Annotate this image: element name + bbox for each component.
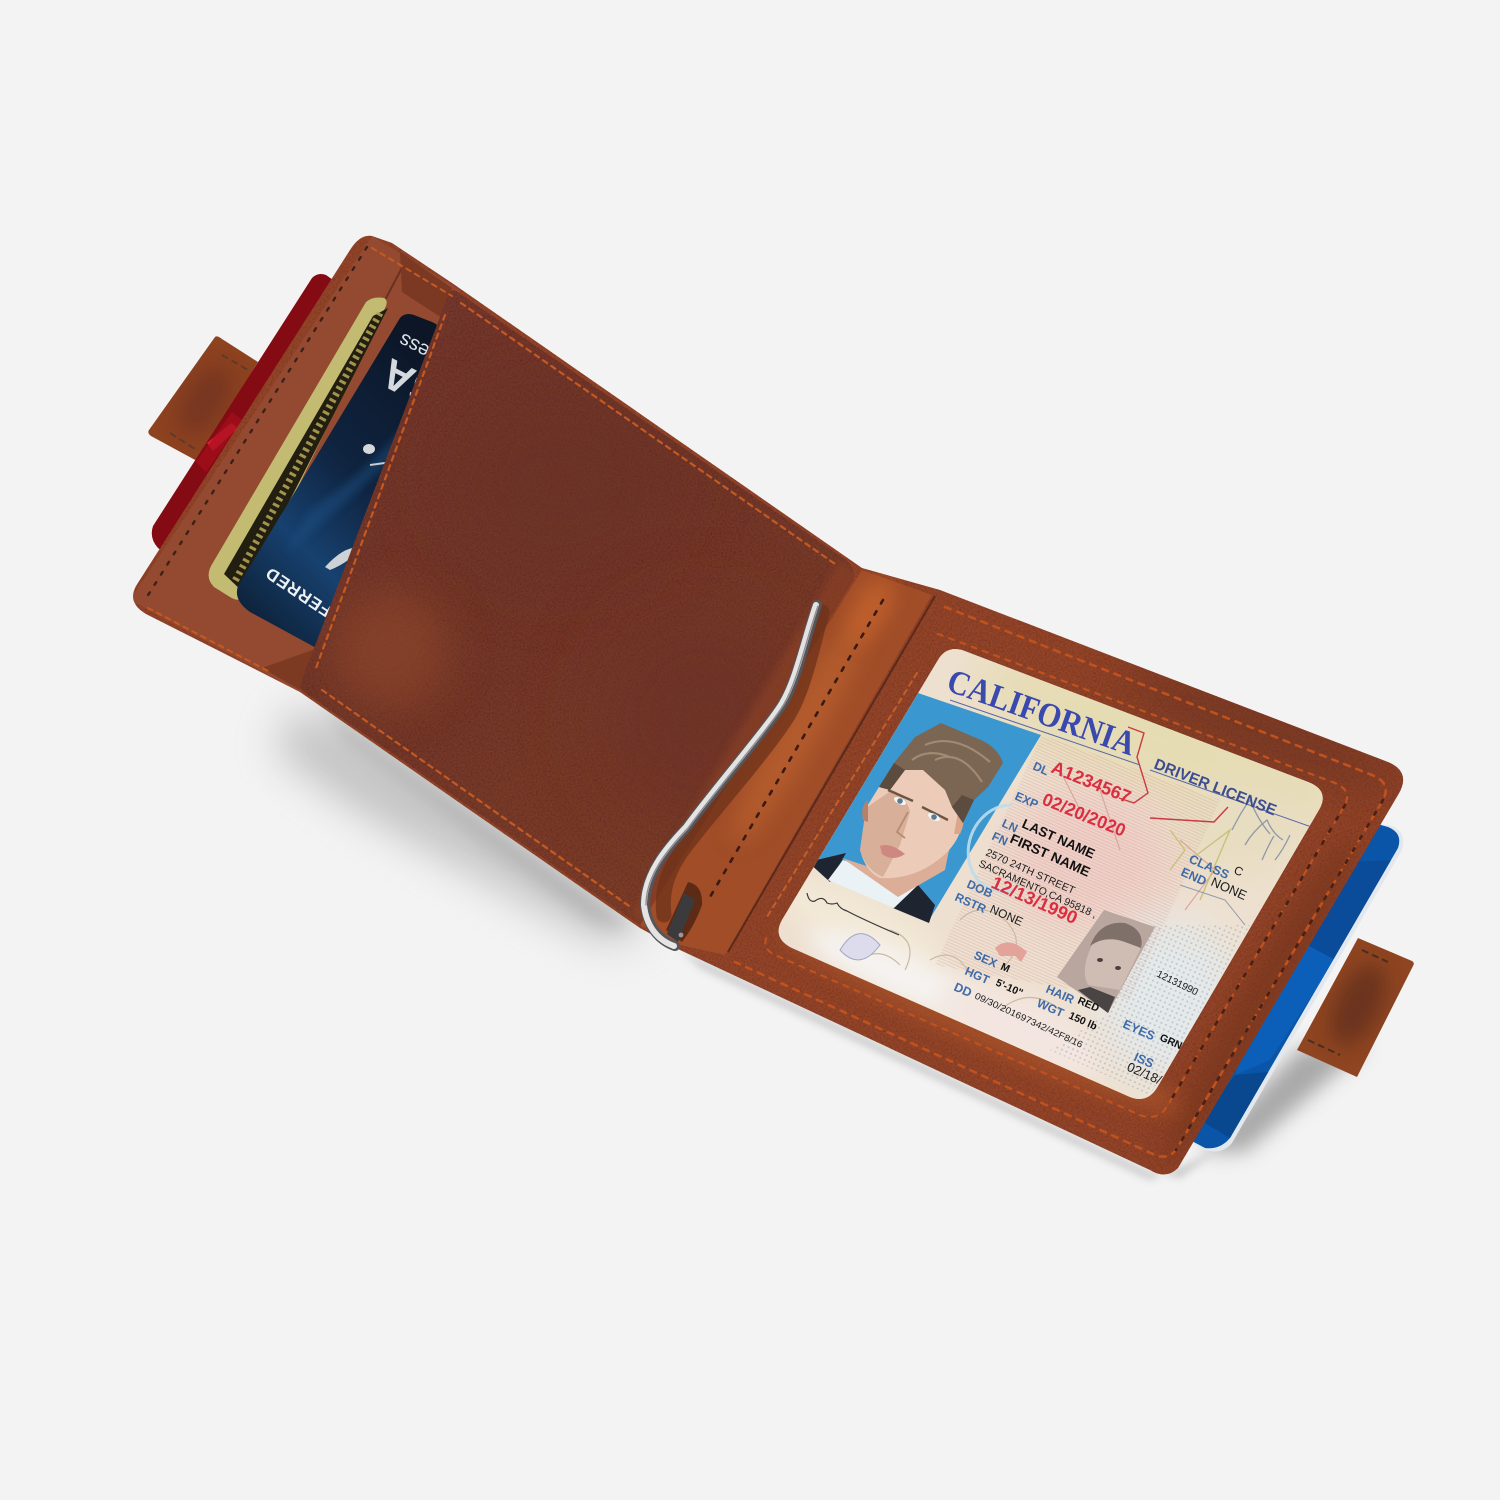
card silver details	[325, 444, 392, 570]
license text: M	[999, 961, 1012, 975]
ID window: California driver license	[778, 649, 1323, 1099]
license text: 5'-10"	[994, 977, 1025, 999]
leather seam lines	[262, 252, 935, 952]
hair	[879, 723, 1003, 823]
license background artwork	[778, 649, 1323, 1099]
cast shadows	[275, 700, 1368, 1180]
center spine highlight	[640, 570, 932, 955]
license text: EYES	[1121, 1017, 1157, 1043]
portrait photo	[808, 693, 1041, 923]
license text: DD	[952, 980, 974, 1000]
license text: CALIFORNIA	[942, 663, 1141, 763]
license text: SEX	[972, 948, 999, 971]
license text: 150 lb	[1067, 1010, 1099, 1033]
product photo: open leather wallet	[133, 236, 1414, 1182]
card lettering: SA	[374, 349, 447, 418]
license text: ISS	[1132, 1050, 1156, 1071]
face	[860, 770, 960, 878]
license text: END	[1179, 865, 1209, 888]
jacket and shirt	[814, 853, 846, 882]
license text: RSTR	[953, 890, 989, 916]
license text: SACRAMENTO,CA 95818 ,	[977, 858, 1099, 921]
license text: EXP	[1013, 789, 1040, 812]
card lettering	[262, 328, 447, 641]
license text: HAIR	[1044, 982, 1077, 1007]
license text: NONE	[1209, 874, 1249, 903]
license text: A1234567	[1049, 757, 1134, 807]
money clip	[644, 605, 822, 946]
license text: WGT	[1035, 996, 1067, 1020]
license text: LN	[1000, 816, 1020, 835]
gold card	[209, 298, 388, 600]
ears, eyes, brows, nose, mouth	[862, 790, 964, 858]
license text: 12/13/1990	[988, 872, 1081, 928]
money clip rivet slot	[666, 882, 702, 942]
blue card behind right side	[1190, 822, 1403, 1151]
license text: FN	[990, 829, 1010, 848]
inner flap panel	[300, 291, 860, 925]
navy card	[237, 314, 447, 650]
left pull tab	[148, 336, 258, 461]
license text: DRIVER LICENSE	[1152, 756, 1279, 819]
license text: C	[1232, 863, 1246, 879]
license text: NONE	[988, 902, 1025, 929]
license text: 02/18/	[1125, 1059, 1164, 1088]
license text: DOB	[965, 877, 995, 901]
ghost portrait	[1057, 910, 1155, 1013]
license text: RED	[1076, 995, 1101, 1015]
license text: 2570 24TH STREET	[984, 847, 1077, 897]
card lettering: ess	[396, 328, 433, 362]
left pocket panel tint	[130, 236, 460, 692]
wallet leather body	[130, 236, 1409, 1175]
red card behind left pocket	[152, 274, 340, 560]
license text: 12131990	[1155, 969, 1200, 998]
right panel stitching	[735, 607, 1386, 1157]
license text	[942, 663, 1279, 1088]
signature	[807, 893, 899, 935]
license text: CLASS	[1187, 852, 1231, 882]
license text: 02/20/2020	[1040, 789, 1129, 841]
license text: HGT	[963, 964, 992, 987]
card lettering: PREFERRED	[262, 564, 366, 641]
license text: FIRST NAME	[1008, 831, 1092, 880]
right pull tab	[1297, 938, 1414, 1077]
license text: 09/30/201697342/42F8/16	[973, 991, 1084, 1050]
license text: GRN	[1158, 1032, 1184, 1052]
license text: DL	[1031, 759, 1051, 778]
flap and pocket stitching	[145, 247, 917, 917]
license text: LAST NAME	[1020, 816, 1097, 861]
